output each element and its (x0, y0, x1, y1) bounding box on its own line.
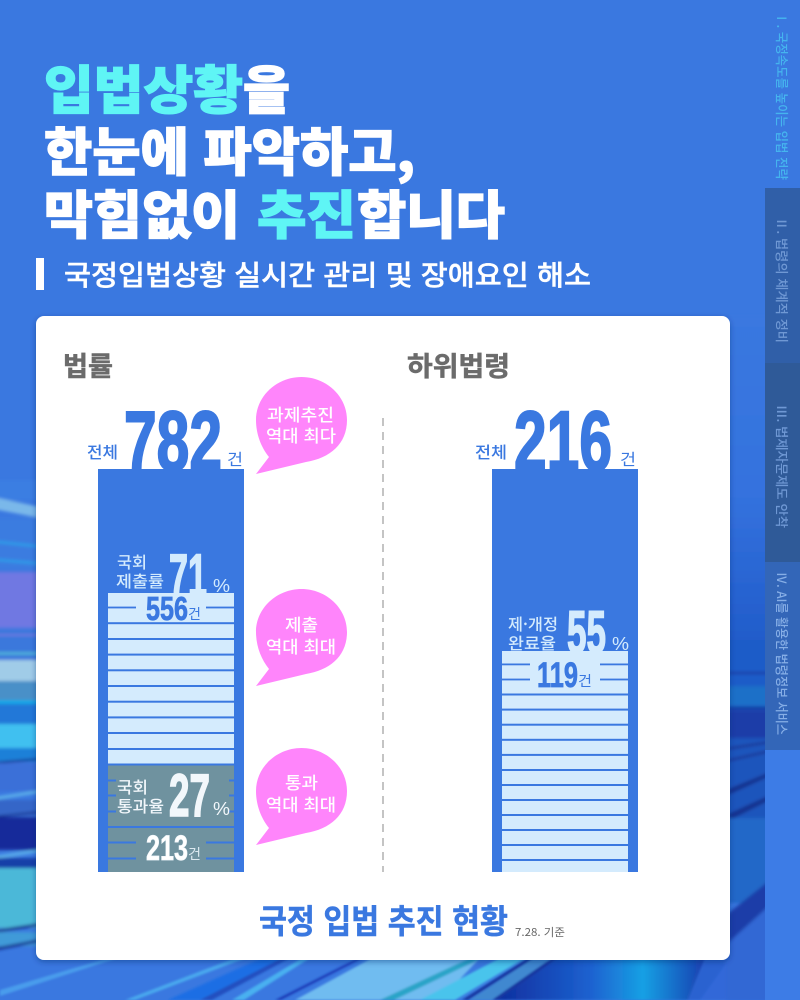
panel heading: 하위법령: 하위법령 (407, 345, 510, 384)
tab 2: Ⅱ. 법령의 체계적 정비 (773, 217, 792, 343)
submitted rows (108, 593, 234, 766)
completion rate label: 완료율 (508, 630, 556, 654)
title: 한눈에 파악하고, (44, 111, 415, 186)
total label 216: 216 (514, 394, 612, 488)
passage rate label (117, 762, 230, 829)
callout: 제출 역대 최대 (256, 589, 347, 686)
callout: 통과 역대 최대 (256, 748, 347, 845)
total label 216 (475, 394, 636, 488)
submission rate label: % (213, 576, 230, 596)
tab 1 (765, 0, 800, 188)
tab 3: Ⅲ. 법제자문제도 안착 (773, 405, 792, 528)
background streaks: bottom (0, 958, 770, 1000)
total label 782 (87, 394, 243, 488)
count 119: 건 (578, 671, 592, 691)
tab 4 (765, 562, 800, 750)
chart caption: 국정 입법 추진 현황 (259, 895, 508, 943)
chart: subordinate statutes bar (475, 394, 638, 872)
count 213: 건 (188, 844, 201, 864)
title (44, 49, 505, 249)
tab 1: Ⅰ. 국정속도를 높이는 입법 전략 (773, 12, 792, 180)
title: 추진 (257, 174, 356, 249)
passage rate label: % (213, 799, 230, 819)
completion rate label: % (612, 634, 629, 654)
count 556: 건 (188, 604, 201, 624)
submission rate label: 제출률 (116, 568, 164, 592)
chart caption: 7.28. 기준 (515, 924, 565, 940)
passage rate label: 27 (169, 762, 210, 829)
passed rows (108, 766, 234, 872)
completion rate label: 55 (567, 599, 606, 666)
title: 합니다 (357, 174, 505, 249)
callout: 과제추진 역대 최다: 과제추진 (267, 401, 334, 426)
title: 입법상황 (44, 49, 243, 124)
callout: 제출 역대 최대: 제출 (285, 611, 318, 636)
total label 216: 전체 (475, 439, 507, 463)
chart: laws bar (87, 394, 244, 872)
subtitle: 국정입법상황 실시간 관리 및 장애요인 해소 (64, 254, 591, 294)
background streaks: left (0, 480, 40, 951)
tab 3 (765, 363, 800, 562)
side navigation tabs (765, 0, 800, 1000)
submission rate label (116, 542, 230, 609)
count 213: 213 (146, 829, 188, 868)
callout: 통과 역대 최대: 역대 최대 (266, 791, 336, 816)
completion rate label (508, 599, 629, 666)
passage rate label: 국회 (117, 774, 148, 798)
submission rate label: 국회 (117, 549, 147, 573)
background streaks: right (726, 316, 770, 1000)
tab 4: Ⅳ. AI를 활용한 법령정보 서비스 (773, 572, 792, 735)
count 556: 556 (146, 590, 188, 627)
submission rate label: 71 (169, 542, 207, 609)
total label 782: 전체 (87, 439, 118, 463)
callout: 과제추진 역대 최다: 역대 최다 (266, 422, 336, 447)
title: 막힘없이 (44, 174, 240, 249)
completion rate label: 제·개정 (508, 611, 558, 635)
total label 216: 건 (620, 446, 636, 470)
divider (382, 418, 384, 872)
panel: status card (36, 316, 730, 960)
callout: 과제추진 역대 최다 (256, 377, 347, 474)
passage rate label: 통과율 (117, 793, 164, 817)
total label 782: 782 (124, 394, 222, 488)
panel heading: 법률: 법률 (63, 345, 113, 384)
count 119: 119 (537, 656, 578, 695)
tab 2 (765, 188, 800, 363)
callout: 통과 역대 최대: 통과 (285, 769, 318, 794)
total label 782: 건 (227, 446, 243, 470)
title: 을 (243, 49, 290, 124)
callout: 제출 역대 최대: 역대 최대 (266, 633, 336, 658)
completed rows (502, 651, 628, 872)
